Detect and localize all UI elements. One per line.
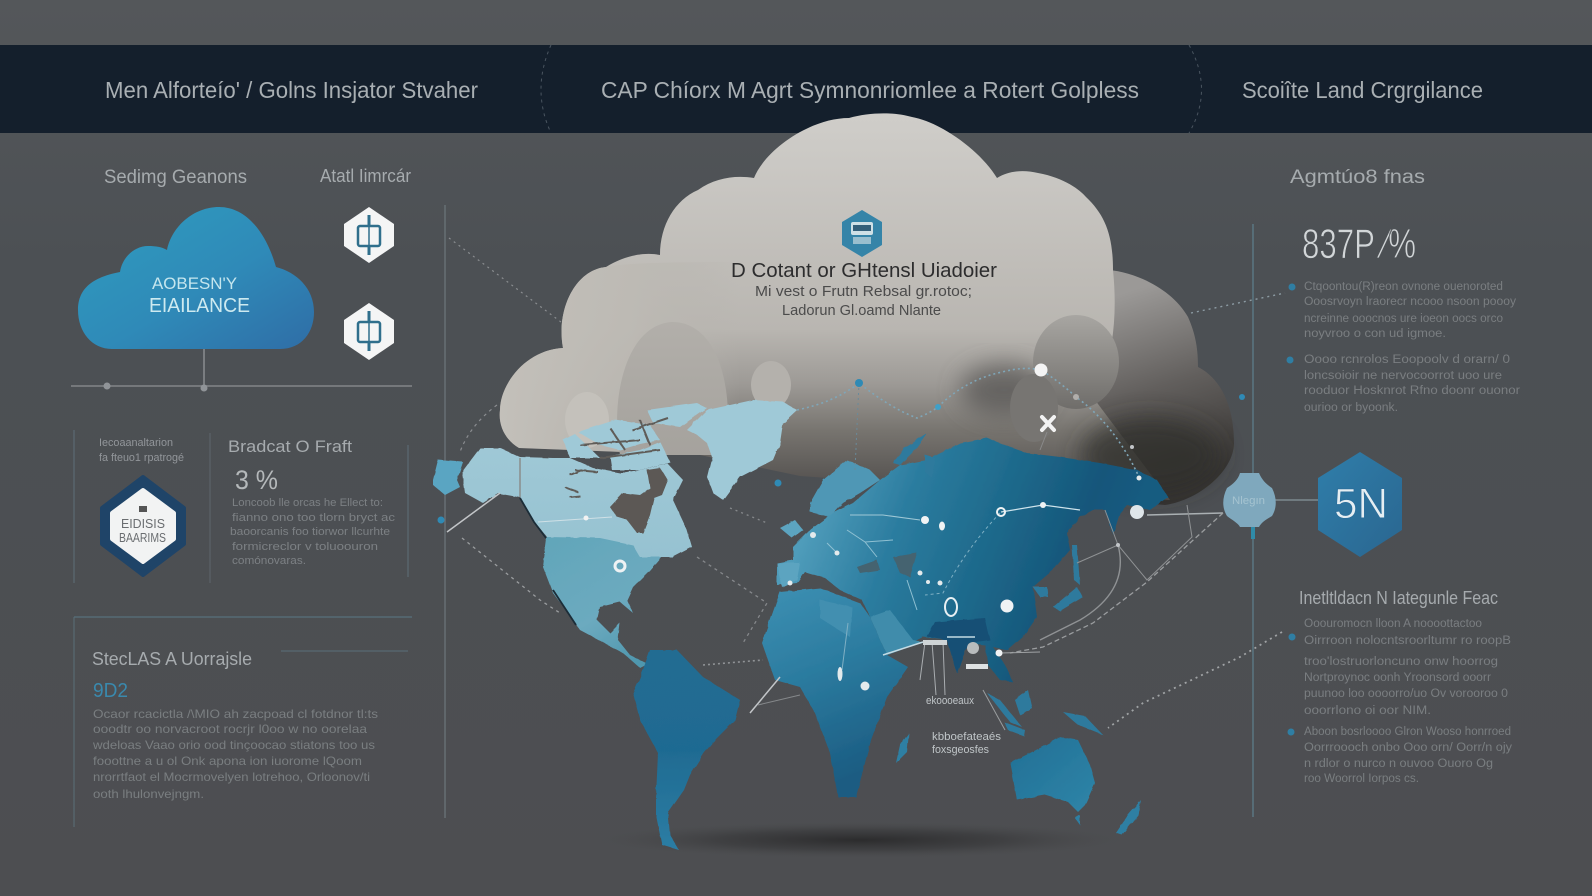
panel paragraph: ooth lhulonvejngm.: [93, 787, 204, 801]
heading: Agmtúo8 fnas: [1290, 167, 1425, 188]
divider line right: [1252, 224, 1254, 817]
paragraph two: [1304, 726, 1512, 785]
badge caption: Iecoaanaltarion: [99, 437, 173, 449]
icon: blue hexagon stat: 5N: [1334, 480, 1388, 528]
stat paragraph: formicreclor v toluoouron: [232, 541, 378, 553]
header title centre: CAP Chíorx M Agrt Symnonriomlee a Rotert Golpless: [601, 77, 1139, 103]
water: Black Sea and Caspian: [857, 553, 917, 577]
stat paragraph: Loncoob lle orcas he Ellect to:: [232, 497, 383, 509]
paragraph two: loncsoioir ne nervocoorrot uoo ure: [1304, 370, 1502, 382]
right links: [1191, 293, 1285, 313]
stat paragraph: [230, 497, 396, 567]
continent: USA Mexico and Central America: [543, 535, 667, 668]
continent: Africa: [762, 588, 908, 797]
continent: Australia: [1010, 737, 1095, 812]
heading: left: Sedimg Geanons: [104, 167, 247, 188]
icon: cloud hexagon: [842, 210, 882, 257]
cloud: left lighter side: [500, 262, 740, 455]
paragraph one: Oirrroon nolocntsroorltumr ro roopB: [1304, 635, 1511, 647]
lines across map: [538, 517, 612, 522]
paragraph two: [1304, 354, 1520, 414]
heading: hex column: Atatl Iimrcár: [320, 166, 411, 186]
ground shadow: [600, 822, 1120, 858]
cloud: left inner lobes: [565, 322, 791, 455]
water: arctic channels: [565, 418, 668, 497]
paragraph two: Oorrroooch onbo Ooo orn/ Oorr/n ojy: [1304, 742, 1512, 754]
map markers: [438, 364, 1245, 690]
region: north Africa shade: [820, 600, 852, 637]
cloud: right inner lobes: [960, 315, 1220, 493]
paragraph one: noyvroo o con ud igmoe.: [1304, 328, 1446, 340]
region: Arabia: [870, 610, 923, 655]
continent: South America: [633, 650, 740, 850]
paragraph two: ourioo or byoonk.: [1304, 402, 1398, 414]
cloud subtitle: Ladorun Gl.oamd Nlante: [782, 302, 941, 319]
panel value: 9D2: [93, 680, 128, 702]
panel: right stat: [1223, 452, 1402, 557]
cloud subtitle: [755, 283, 972, 319]
central cloud: [500, 113, 1234, 505]
border Alaska: [519, 458, 521, 497]
paragraph one: troo'lostruorloncuno onw hoorrog: [1304, 656, 1498, 668]
icon: white hexagon top: [344, 207, 394, 263]
icon: navy hexagon badge: EIDISIS: [121, 516, 165, 531]
paragraph two: rooduor Hosknrot Rfno doonr ouonor: [1304, 385, 1520, 397]
icon: navy hexagon badge: [102, 477, 184, 575]
icon: blue cloud: EIAILANCE: [149, 295, 250, 317]
panel paragraph: wdeloas Vaao orio ood tinçoocao stiatons too us: [92, 738, 375, 752]
Pacific coast dark line: [520, 498, 576, 625]
region: Spain and Britain: [777, 520, 803, 587]
network lines: [447, 238, 1285, 730]
panel: right bottom: [1288, 588, 1512, 785]
header title left: Men Alforteío' / Golns Insjator Stvaher: [105, 77, 478, 103]
islands: Canadian arctic: [563, 403, 707, 470]
continent: Eurasia: [777, 438, 1168, 682]
panel paragraph: fooottne a u ol Onk apona ion iuorome lQoom: [93, 754, 362, 768]
icon: blue cloud: AOBESN'Y: [152, 274, 237, 293]
panel paragraph: [92, 707, 378, 801]
icon: small node: Nlegın: [1232, 495, 1265, 507]
icon: blue hexagon stat: [1318, 452, 1402, 557]
continents with rough coastlines: [433, 400, 1168, 850]
region: India: [927, 618, 990, 673]
paragraph two: Aboon bosrloooo Glron Wooso honrroed: [1304, 726, 1511, 738]
bullet dots: [1288, 634, 1296, 736]
panel paragraph: Ocaor rcacictla /\MIO ah zacpoad cl fotdnor tl:ts: [93, 707, 378, 721]
continent: Canada and Alaska: [462, 448, 692, 557]
stat heading: Bradcat O Fraft: [228, 437, 352, 456]
panel: left bottom: [92, 649, 378, 801]
water: Hudson Bay: [610, 468, 668, 533]
header band: [0, 45, 1592, 133]
divider lines left: [74, 205, 445, 827]
world map: [433, 400, 1168, 850]
panel: left middle badge: [99, 437, 396, 575]
paragraph two: roo Woorrol Iorpos cs.: [1304, 773, 1419, 785]
icon: blue cloud: [78, 207, 314, 349]
paragraph one: [1304, 281, 1516, 340]
panel heading: StecLAS A Uorrajsle: [92, 649, 252, 669]
marker: large white node: [1034, 364, 1048, 376]
map labels: ekoooeaux: [926, 695, 974, 707]
islands: New Zealand Tasmania Madagascar: [896, 733, 1141, 835]
bullet dots: [1286, 284, 1296, 364]
stat value: 3 %: [235, 465, 278, 495]
marker: cross: [1042, 417, 1054, 430]
paragraph one: [1304, 618, 1511, 717]
big value: 837P ⁄%: [1302, 220, 1416, 267]
dotted lines over cloud: [797, 368, 1139, 477]
badge caption: fa fteuo1 rpatrogé: [99, 452, 184, 464]
continent: Greenland: [687, 400, 797, 500]
panel paragraph: nrorrtfaot el Mocrmovelyen lotrehoo, Orloonov/ti: [93, 770, 370, 784]
continent: Scandinavia: [810, 460, 880, 517]
panel paragraph: ooodtr oo norvacroot rocrjr l0oo w no oorelaa: [93, 722, 367, 736]
heading: Inetltldacn N Iategunle Feac: [1299, 588, 1498, 608]
paragraph one: puunoo loo oooorro/uo Ov vorooroo 0: [1304, 688, 1508, 700]
cloud: main body: [500, 113, 1170, 500]
panel: left top: [71, 166, 412, 392]
connector line and nodes: [71, 349, 412, 392]
panel: right top: [1286, 167, 1520, 414]
connector: [1275, 499, 1318, 501]
header title right: Scoiîte Land Crgrgilance: [1242, 77, 1483, 103]
icon: small node: [1223, 473, 1276, 539]
cloud: back lobes: [1000, 270, 1234, 505]
paragraph one: ooorrlono oi oor NIM.: [1304, 705, 1431, 717]
islands: Asia: [893, 433, 1103, 736]
icon: navy hexagon badge: BAARIMS: [119, 530, 166, 545]
island: Chukotka: [433, 460, 463, 495]
paragraph one: Nortproynoc oonh Yroonsord ooorr: [1304, 672, 1491, 684]
cloud subtitle: Mi vest o Frutn Rebsal gr.rotoc;: [755, 283, 972, 300]
stat paragraph: baoorcanis foo tiorwor llcurhte: [230, 526, 390, 538]
cloud title: D Cotant or GHtensl Uiadoier: [731, 260, 997, 282]
map labels: kbboefateaés: [932, 731, 1002, 743]
icon: white hexagon bottom: [344, 303, 394, 360]
badge caption: [99, 437, 184, 464]
stat paragraph: comónovaras.: [232, 555, 306, 567]
paragraph two: n rdlor o nurco n ouvoo Ouoro Og: [1304, 758, 1493, 770]
paragraph one: Ooosrvoyn lraorecr ncooo nsoon poooy: [1304, 296, 1516, 308]
paragraph one: Ctqoontou(R)reon ovnone ouenoroted: [1304, 281, 1503, 293]
paragraph one: Ooouromocn lloon A noooottactoo: [1304, 618, 1482, 630]
paragraph one: ncreinne ooocnos ure ioeon oocs orco: [1304, 313, 1503, 325]
paragraph two: Oooo rcnrolos Eoopoolv d orarn/ 0: [1304, 354, 1510, 366]
map labels: [926, 695, 1002, 756]
dashed left links: [449, 238, 561, 322]
map labels: foxsgeosfes: [932, 744, 989, 756]
stat paragraph: fianno ono too tlorn bryct ac: [232, 512, 396, 524]
